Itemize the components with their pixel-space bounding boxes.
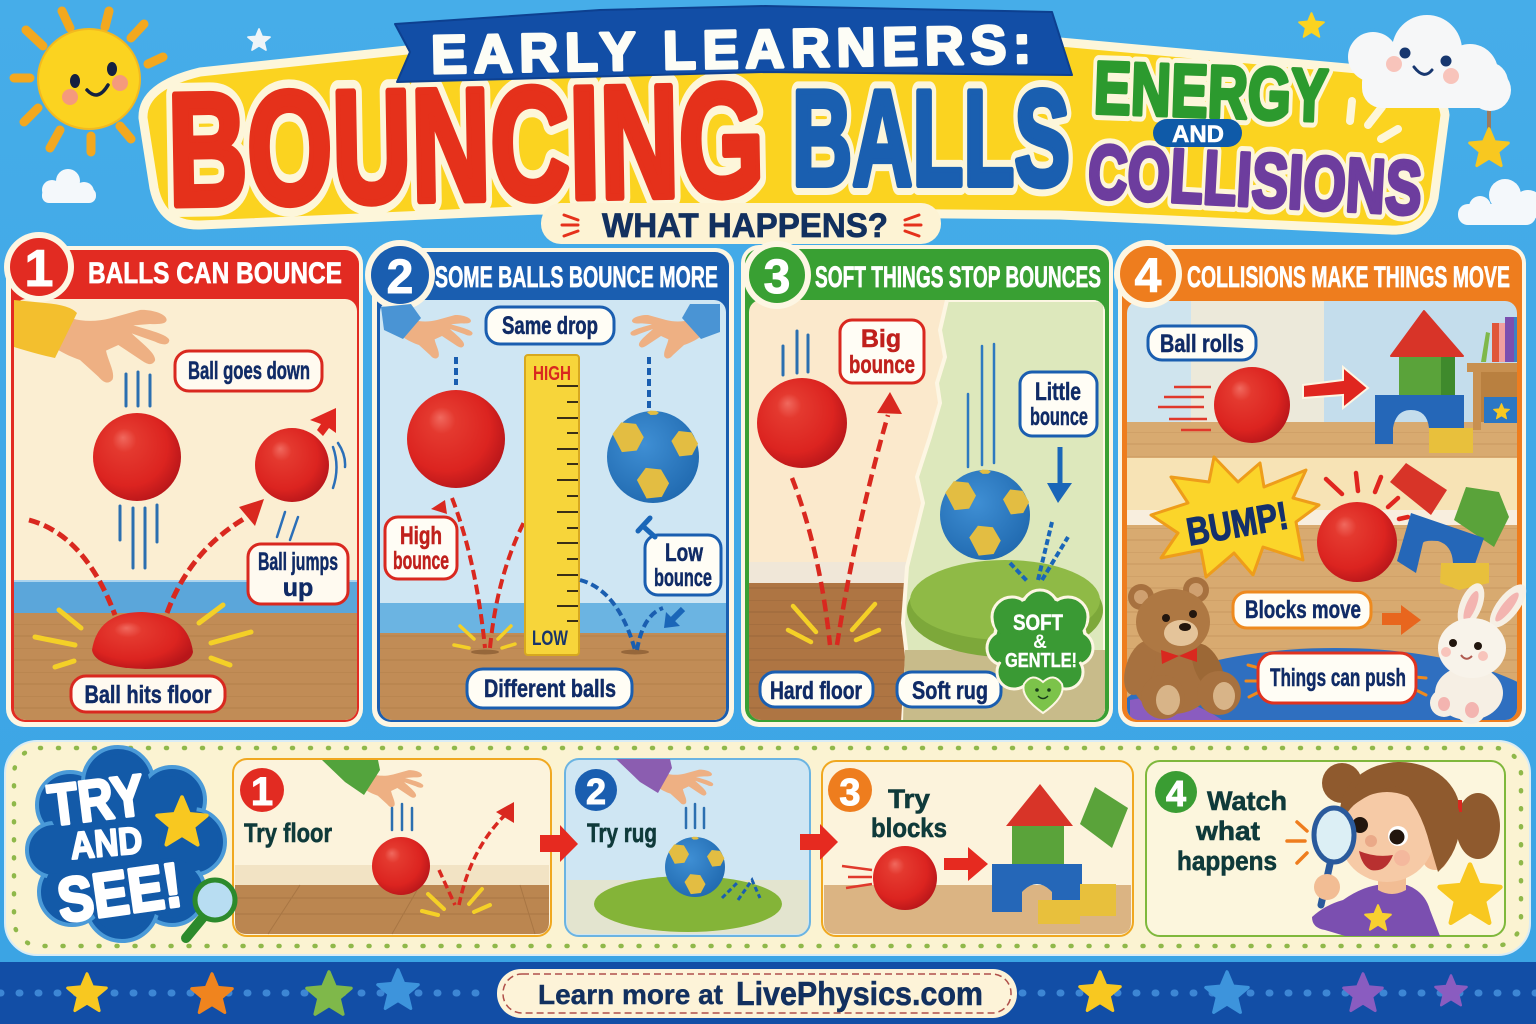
rug: [907, 560, 1103, 657]
number badge: [240, 768, 284, 814]
girl face: [1340, 792, 1434, 882]
small high arrow: [431, 500, 447, 514]
ruler: HIGH: [533, 363, 571, 385]
motion lines: [120, 505, 157, 568]
hand with sleeve: [322, 760, 423, 807]
girl mouth: [1359, 851, 1393, 870]
girl with magnifier: [1287, 762, 1500, 936]
panel 2 number badge: 2: [387, 251, 413, 304]
sun: [14, 11, 163, 152]
label: big bounce: Big: [861, 325, 901, 353]
red bounce paths: [452, 498, 525, 648]
step label: Try rug: [587, 818, 657, 848]
label: ball rolls: Ball rolls: [1160, 330, 1244, 358]
badge: soft and gentle: SOFT: [1013, 610, 1063, 635]
smiling cloud with hanging star: [1348, 15, 1511, 166]
number badge: 1: [251, 770, 273, 814]
panel 3 number badge: 3: [764, 251, 790, 304]
panel 2: some balls bounce more: [365, 240, 734, 727]
arrow head: [496, 802, 514, 823]
label: different balls: Different balls: [484, 675, 616, 703]
step label: blocks: [871, 813, 947, 843]
pigtails and hair back: [1322, 762, 1500, 862]
panel 1 number badge: 1: [25, 240, 53, 298]
panel 3 heading: SOFT THINGS STOP BOUNCES: [815, 261, 1101, 294]
label: ball hits floor: Ball hits floor: [84, 681, 212, 709]
try and see badge: TRY: [44, 762, 148, 839]
teddy bear: [1118, 577, 1241, 719]
bump burst: BUMP!: [1183, 494, 1291, 554]
step label: [1177, 786, 1287, 876]
label: low bounce: Low: [665, 539, 703, 567]
headline: Balls: BALLS: [792, 62, 1070, 214]
impact sparks: [788, 604, 879, 642]
arrow up: [310, 408, 336, 436]
step label: Try floor: [244, 818, 332, 848]
soccer ball: [940, 470, 1030, 560]
impact marks: [471, 650, 649, 654]
website pill: [497, 969, 1017, 1018]
headline: Bouncing: [166, 50, 766, 239]
impact sparks: [454, 626, 515, 648]
label: blocks move: Blocks move: [1245, 596, 1361, 624]
motion lines: [783, 331, 808, 375]
label: things can push: Things can push: [1270, 664, 1406, 692]
drop lines: [968, 344, 994, 467]
red ball: [372, 837, 430, 895]
girl ear: [1422, 844, 1448, 870]
ruler: LOW: [532, 627, 568, 650]
label: low bounce: bounce: [654, 564, 712, 592]
small clouds and stars in sky: [42, 13, 1536, 225]
headline: Energy: ENERGY: [1093, 46, 1329, 137]
step card 1: try floor: [233, 759, 551, 936]
headline: Balls: BALLS: [792, 62, 1070, 214]
step label: happens: [1177, 846, 1277, 876]
label: big bounce: [840, 320, 924, 383]
colliding ball: [1317, 502, 1397, 582]
label: ball goes down: [175, 351, 322, 391]
panel 1: balls can bounce: [4, 232, 363, 727]
speed lines: [842, 866, 872, 888]
arrow head: [877, 392, 902, 414]
label: big bounce: bounce: [849, 351, 915, 379]
impact sparks: [35, 605, 251, 667]
ruler: [525, 355, 579, 655]
orange arrow: [1382, 605, 1421, 635]
label: hard floor: [760, 672, 873, 707]
red ball: [873, 846, 937, 910]
headline: Balls: [792, 62, 1070, 214]
magnifier lens: [1314, 808, 1354, 862]
step label: Try: [888, 784, 930, 814]
red bounce paths: [792, 415, 888, 645]
footer stars: [68, 970, 1467, 1014]
bunny: [1430, 579, 1533, 724]
impact marks: [1326, 473, 1408, 519]
motion lines: [392, 804, 412, 830]
number badge: 4: [1166, 773, 1186, 814]
headline: Bouncing: BOUNCING: [166, 50, 766, 239]
rug: [594, 876, 782, 932]
ribbon: early learners: EARLY LEARNERS:: [431, 15, 1031, 85]
label: soft rug: Soft rug: [912, 677, 988, 705]
arrow right: [1303, 367, 1368, 408]
label: ball hits floor: [71, 676, 225, 712]
label: ball rolls: [1148, 326, 1256, 360]
falling ball: [93, 413, 181, 501]
badge: soft and gentle: [987, 590, 1093, 713]
star: [1440, 865, 1500, 923]
panel 3 scene: [749, 300, 1105, 723]
badge: soft and gentle: GENTLE!: [1005, 650, 1077, 672]
label: blocks move: [1233, 592, 1371, 628]
girl eyes: [1352, 817, 1408, 846]
arrow head: [239, 499, 264, 526]
red ball: [757, 378, 847, 468]
title banner: [143, 6, 1445, 245]
arrow between steps: [540, 825, 578, 862]
panel 4 number badge: [1114, 240, 1182, 308]
soccer ball: [607, 411, 699, 503]
blue bounce paths: [580, 580, 663, 650]
block tower: [992, 784, 1128, 924]
number badge: 2: [586, 771, 606, 812]
label: ball jumps up: [248, 544, 348, 604]
label: low bounce: [645, 535, 721, 595]
speed lines: [1158, 387, 1211, 430]
headline: Bouncing: BOUNCING: [166, 50, 766, 239]
girl neck: [1378, 878, 1406, 894]
bounce path arrows: [29, 517, 247, 615]
sparkle dashes: [1350, 101, 1398, 139]
arrow down: [1047, 447, 1072, 503]
rolling ball: [1214, 367, 1290, 443]
panel 4: collisions make things move: [1114, 240, 1526, 727]
panel 1 number badge: [4, 232, 74, 302]
rising ball: [255, 428, 329, 502]
and pill: AND: [1172, 121, 1224, 148]
number badge: [1155, 771, 1197, 814]
step label: what: [1195, 816, 1260, 846]
label: ball goes down: Ball goes down: [188, 357, 310, 385]
step card 4: watch what happens: [1146, 761, 1505, 936]
label: soft rug: [897, 672, 1001, 707]
right hand: [630, 304, 720, 359]
panel 2 scene: [380, 300, 726, 721]
motion lines: [686, 804, 704, 828]
label: high bounce: [385, 517, 457, 579]
step card 3: try blocks: [822, 761, 1133, 936]
panel 3 number badge: [743, 241, 811, 309]
label: same drop: Same drop: [502, 312, 598, 340]
hand dropping ball: [14, 300, 169, 383]
orange ticks: [1287, 822, 1307, 863]
footer band: [0, 962, 1536, 1024]
panel 4 bottom scene: [1127, 458, 1517, 720]
number badge: 3: [839, 772, 861, 814]
label: ball jumps up: up: [283, 574, 313, 602]
label: little bounce: bounce: [1030, 403, 1088, 431]
label: high bounce: High: [400, 522, 442, 550]
shirt star: [1365, 905, 1391, 930]
try and see badge: SEE!: [53, 851, 186, 936]
squashed ball: [92, 612, 193, 669]
flying blocks: [1390, 463, 1509, 590]
arrow between steps: [800, 824, 838, 860]
label: things can push: [1246, 653, 1426, 703]
panel 2 heading: SOME BALLS BOUNCE MORE: [435, 261, 718, 294]
panel 3: soft things stop bounces: [741, 241, 1113, 727]
number badge: [575, 769, 617, 812]
label: little bounce: Little: [1035, 378, 1081, 406]
motion lines: [126, 372, 150, 406]
bounce arrow: [439, 815, 505, 905]
label: little bounce: [1020, 372, 1097, 436]
girl fringe: [1345, 763, 1460, 872]
bump burst: [1151, 457, 1319, 577]
and pill: [1153, 119, 1242, 148]
girl body: [1312, 885, 1440, 936]
website pill: Learn more at: [538, 979, 723, 1010]
pointer arrows: [638, 518, 683, 628]
motion curves: [277, 443, 345, 540]
headline: Energy: ENERGY: [1093, 46, 1329, 137]
step label: [871, 784, 947, 843]
magnifier: [186, 880, 235, 938]
panel 1 scene: [14, 299, 357, 721]
toy shelf: [1467, 317, 1517, 430]
what happens pill: [541, 203, 941, 245]
step label: Watch: [1207, 786, 1287, 816]
small bounce: [722, 880, 760, 900]
what happens pill: WHAT HAPPENS?: [602, 207, 888, 245]
try and see badge: [27, 747, 225, 941]
hand with sleeve: [616, 759, 713, 804]
arrow right: [944, 847, 988, 881]
sparks: [422, 889, 490, 915]
number badge: [828, 768, 872, 814]
small bounce: [1010, 522, 1068, 582]
try and see strip: [5, 741, 1530, 955]
panel 2 number badge: [365, 240, 435, 310]
label: hard floor: Hard floor: [770, 677, 862, 705]
soccer ball: [665, 837, 725, 897]
panel 4 top scene: [1127, 301, 1517, 458]
girl nose and cheek: [1365, 835, 1410, 866]
magnifier handle and hand: [1314, 864, 1340, 905]
badge: soft and gentle: &: [1033, 632, 1047, 653]
left hand: [381, 304, 473, 359]
label: same drop: [486, 307, 614, 344]
website pill: LivePhysics.com: [736, 975, 983, 1012]
step card 2: try rug: [565, 759, 810, 936]
panel 4 number badge: 4: [1135, 250, 1162, 303]
try and see badge: AND: [69, 820, 144, 868]
block tower: [1375, 311, 1473, 453]
yellow sign: [143, 42, 1445, 230]
panel 1 heading: BALLS CAN BOUNCE: [88, 257, 342, 290]
label: different balls: [467, 669, 632, 708]
red ball: [407, 390, 505, 488]
label: high bounce: bounce: [393, 547, 449, 575]
drop lines: [456, 357, 649, 408]
label: ball jumps up: Ball jumps: [258, 548, 338, 576]
